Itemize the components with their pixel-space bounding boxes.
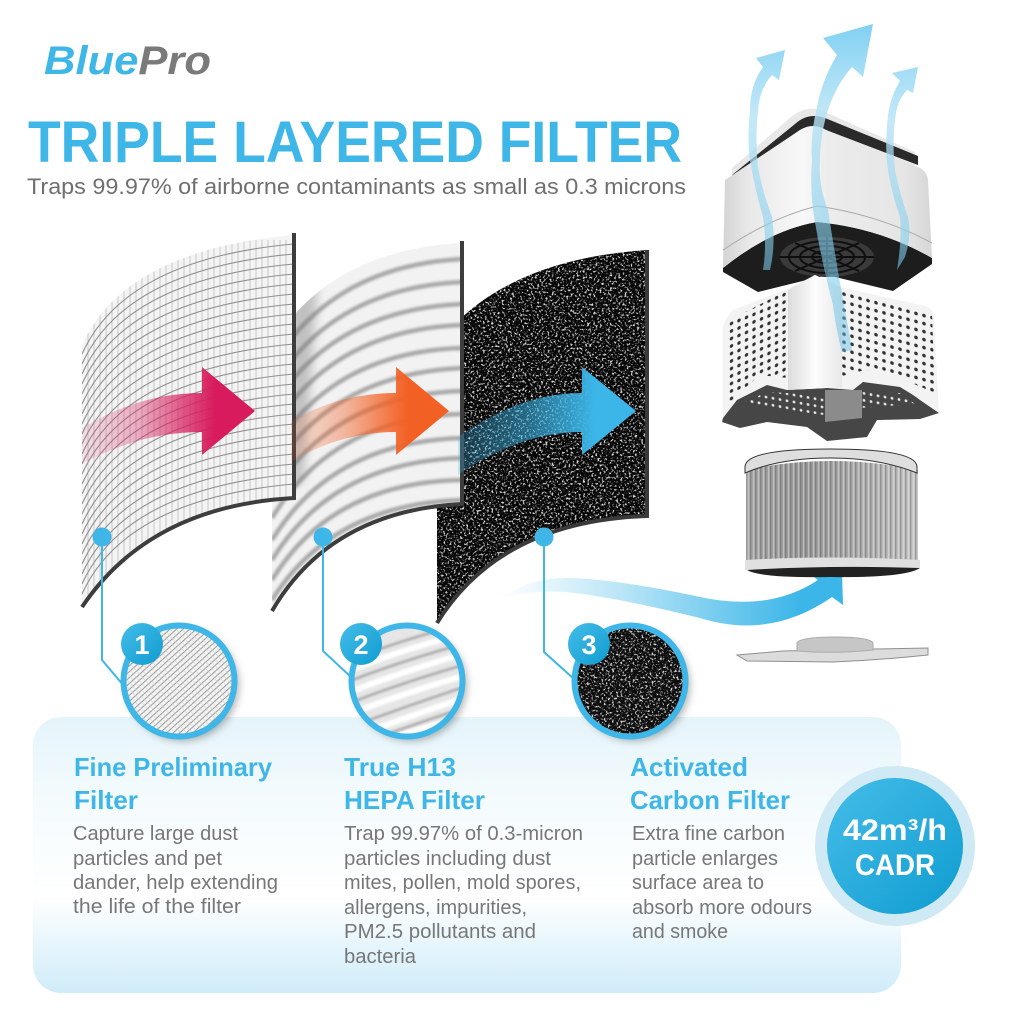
arrow: up flow right: [886, 67, 918, 270]
text block: Fine Preliminary Filter: Fine Preliminary: [74, 752, 273, 782]
text block: True H13 HEPA Filter: mites, pollen, mold spores,: [344, 872, 581, 894]
number badge 3: [568, 623, 610, 665]
product: perforated mid shell: [723, 275, 939, 418]
title: TRIPLE LAYERED FILTER: [28, 110, 682, 175]
number badge 1: [121, 623, 163, 665]
subtitle: Traps 99.97% of airborne contaminants as small as 0.3 microns: [27, 174, 686, 199]
arrow: pink airflow through layer 1: [82, 367, 255, 464]
text block: Activated Carbon Filter: and smoke: [632, 921, 728, 943]
number badge 3: 3: [581, 630, 597, 660]
text block: Fine Preliminary Filter: the life of the filter: [73, 896, 241, 918]
text block: True H13 HEPA Filter: [344, 752, 583, 968]
filter layer 1: fine mesh sheet: [82, 233, 294, 620]
arrow: curved blue flow into HEPA cylinder: [500, 572, 843, 625]
number badge 1: 1: [134, 630, 150, 660]
filter layer 2: HEPA pleated sheet: [272, 241, 462, 611]
swatch 1: fine mesh circle: [123, 625, 235, 737]
text block: Activated Carbon Filter: absorb more odours: [632, 897, 812, 919]
arrow: up flow centre: [811, 24, 873, 352]
connector 1: [92, 528, 124, 686]
product: mid shell dark underside: [722, 380, 939, 441]
text block: Activated Carbon Filter: particle enlarges: [632, 848, 778, 870]
text block: True H13 HEPA Filter: Trap 99.97% of 0.3-micron: [344, 823, 583, 845]
text block: Fine Preliminary Filter: Filter: [74, 785, 138, 815]
CADR badge: 42m³/h: [843, 814, 947, 847]
text block: Activated Carbon Filter: Carbon Filter: [630, 785, 790, 815]
text block: True H13 HEPA Filter: particles including dust: [344, 848, 551, 870]
CADR badge: CADR: [855, 849, 935, 882]
arrow: blue airflow through layer 3: [458, 367, 636, 475]
filter layer 3: activated carbon sheet: [430, 240, 655, 630]
text block: Fine Preliminary Filter: particles and pet: [73, 848, 222, 870]
product: top unit underside with fan: [723, 222, 932, 292]
text block: Fine Preliminary Filter: [73, 752, 278, 918]
product: top unit lid: [732, 109, 918, 178]
swatch 3: carbon circle: [574, 625, 686, 737]
text block: True H13 HEPA Filter: allergens, impurities,: [344, 897, 527, 919]
text block: Activated Carbon Filter: Extra fine carbon: [632, 823, 785, 845]
logo: BluePro: BluePro: [44, 39, 211, 83]
connector 2: [314, 528, 351, 677]
info panel background: [33, 717, 901, 993]
text block: Fine Preliminary Filter: Capture large dust: [73, 823, 238, 845]
connector 3: [534, 528, 574, 679]
CADR badge: [815, 766, 975, 926]
text block: True H13 HEPA Filter: PM2.5 pollutants and: [344, 921, 536, 943]
product: top unit black band: [732, 116, 918, 178]
text block: Activated Carbon Filter: [630, 752, 812, 943]
arrow: up flow left: [748, 50, 785, 270]
arrow: orange airflow through layer 2: [291, 367, 449, 462]
text block: Activated Carbon Filter: surface area to: [632, 872, 764, 894]
text block: True H13 HEPA Filter: True H13: [344, 752, 456, 782]
product: base plate: [737, 637, 928, 662]
product exploded view: [722, 109, 939, 662]
text block: Activated Carbon Filter: Activated: [630, 752, 748, 782]
number badge 2: 2: [353, 630, 369, 660]
text block: Fine Preliminary Filter: dander, help extending: [73, 872, 278, 894]
text block: True H13 HEPA Filter: HEPA Filter: [344, 785, 485, 815]
number badge 2: [340, 623, 382, 665]
text block: True H13 HEPA Filter: bacteria: [344, 946, 417, 968]
product: HEPA cylinder: [745, 449, 920, 577]
product: top unit body: [723, 126, 932, 268]
swatch 2: HEPA circle: [345, 622, 470, 745]
